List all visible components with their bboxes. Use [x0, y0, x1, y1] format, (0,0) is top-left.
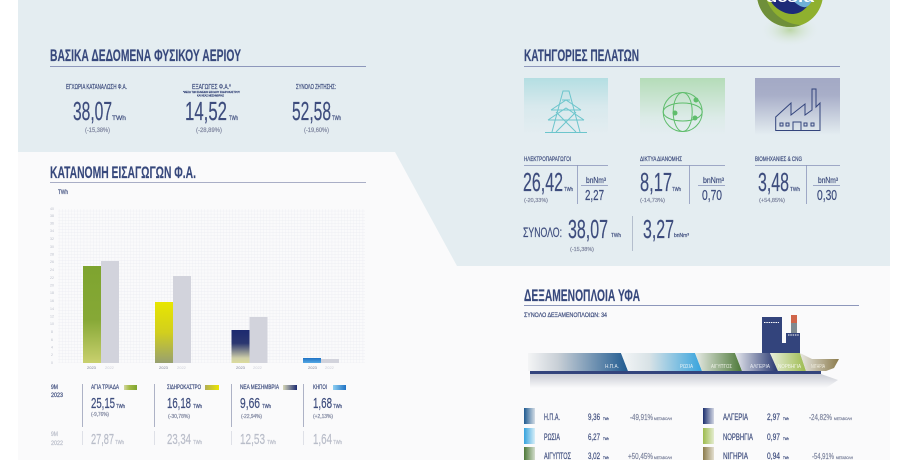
stat: domestic consumption: (-15,38%): [85, 127, 110, 134]
period labels: 9Μ: [51, 384, 58, 391]
stat column: Sidirokastro: 16,18: [167, 395, 191, 412]
legend row: Norway: 0,97: [767, 432, 780, 442]
superstructure: [762, 315, 800, 353]
icon panel: globe network: [640, 78, 725, 135]
stat column: Kipoi: (+2,13%): [313, 414, 333, 420]
hull shadow: [530, 374, 838, 388]
stat: total demand: 52,58: [292, 96, 331, 126]
stat column: Agia Triada: TWh: [115, 440, 124, 446]
customer: industry and CNG: 0,30: [817, 187, 837, 204]
axis labels: 16: [50, 299, 54, 303]
axis labels: 24: [50, 268, 54, 272]
axis labels: 38: [50, 214, 54, 218]
stat: total demand: TWh: [332, 115, 341, 122]
stat column: Agia Triada: (-9,76%): [91, 412, 109, 418]
stat column: Nea Mesimvria: 9,66: [240, 395, 260, 412]
customer: power producers: ΗΛΕΚΤΡΟΠΑΡΑΓΩΓΟΙ: [524, 156, 571, 163]
customer totals: TWh: [611, 233, 621, 239]
axis labels: 26: [50, 260, 54, 264]
stat: exports: (-28,89%): [196, 127, 222, 134]
stat column: Nea Mesimvria: TWh: [267, 440, 276, 446]
legend row: Algeria: [703, 408, 852, 424]
year labels: 2022: [253, 365, 263, 370]
legend row: Nigeria: [703, 447, 853, 460]
bars: Sidirokastro: [155, 276, 191, 363]
customer totals: bnNm³: [674, 233, 689, 239]
customer: distribution networks: 8,17: [640, 167, 672, 197]
legend row: Russia: [524, 428, 609, 444]
stat column: Agia Triada: [82, 384, 137, 448]
stat column: Sidirokastro: 23,34: [167, 431, 191, 448]
customer: industry and CNG: bnNm³: [818, 176, 838, 185]
stat: total demand: ΣΥΝΟΛΟ ΖΗΤΗΣΗΣ:: [296, 84, 336, 91]
stat: exports: 14,52: [185, 96, 227, 126]
stat: exports: [183, 84, 240, 134]
customer totals: (-15,38%): [570, 247, 594, 253]
year labels: 2023: [87, 365, 97, 370]
stat: total demand: [292, 84, 341, 134]
customer: industry and CNG: (+54,85%): [759, 198, 785, 204]
axis labels: 14: [50, 307, 54, 311]
customer: distribution networks: ΔΙΚΤΥΑ ΔΙΑΝΟΜΗΣ: [640, 156, 682, 163]
stat column: Kipoi: [303, 384, 346, 448]
stat: exports: ΚΑΙ ΝΕΑΣ ΜΕΣΗΜΒΡΙΑΣ: [197, 94, 224, 98]
axis labels: 8: [51, 330, 53, 334]
period labels: 9Μ: [51, 431, 58, 438]
legend row: Algeria: TWh: [783, 416, 789, 421]
hull segment: USA: Η.Π.Α.: [605, 364, 619, 370]
hull segment: Russia: ΡΩΣΙΑ: [680, 364, 693, 370]
stat column: Kipoi: ΚΗΠΟΙ: [313, 384, 327, 391]
bar chart: [50, 190, 365, 370]
customer totals: 3,27: [643, 214, 674, 244]
hull segment: Algeria: [735, 353, 778, 371]
stat: domestic consumption: TWh: [112, 115, 126, 122]
hull segment: Norway: [770, 353, 806, 371]
customer: power producers: [523, 156, 608, 204]
stat column: Kipoi: TWh: [333, 404, 342, 410]
axis labels: 4: [51, 346, 53, 350]
bars: Nea Mesimvria: [232, 317, 268, 363]
axis labels: 20: [50, 284, 54, 288]
stat column: Nea Mesimvria: 12,53: [240, 431, 265, 448]
customer totals: 38,07: [568, 214, 608, 244]
hull segment: Nigeria: [800, 353, 839, 371]
legend row: USA: TWh: [603, 416, 609, 421]
legend row: Norway: TWh: [783, 436, 789, 441]
bar chart: TWh: [58, 190, 68, 196]
stat column: Sidirokastro: (-30,78%): [168, 414, 190, 420]
axis labels: 36: [50, 222, 54, 226]
year labels: 2022: [177, 365, 187, 370]
year labels: 2023: [236, 365, 246, 370]
stat: total demand: (-19,60%): [304, 127, 329, 134]
axis labels: 12: [50, 314, 54, 318]
stat column: Kipoi: 1,64: [313, 431, 332, 448]
stat column: Nea Mesimvria: (-22,94%): [241, 414, 262, 420]
customer: industry and CNG: TWh: [790, 187, 800, 193]
axis labels: 18: [50, 291, 54, 295]
customer totals: [523, 214, 689, 253]
heading: customer categories: ΚΑΤΗΓΟΡΙΕΣ ΠΕΛΑΤΩΝ: [524, 46, 639, 65]
axis labels: 30: [50, 245, 54, 249]
legend row: USA: ΜΕΤΑΒΟΛΗ: [654, 417, 672, 421]
legend row: Russia: ΡΩΣΙΑ: [544, 432, 560, 442]
customer: distribution networks: bnNm³: [703, 176, 724, 185]
stat column: Sidirokastro: TWh: [193, 440, 202, 446]
customer: industry and CNG: 3,48: [758, 167, 789, 197]
legend row: Norway: [703, 428, 789, 444]
legend row: USA: [524, 408, 672, 424]
legend row: Algeria: -24,82%: [809, 413, 832, 422]
stat column: Nea Mesimvria: ΝΕΑ ΜΕΣΗΜΒΡΙΑ: [240, 384, 279, 391]
axis labels: 22: [50, 276, 54, 280]
year labels: 2023: [159, 365, 169, 370]
bars: Agia Triada: [83, 261, 119, 363]
stat: domestic consumption: 38,07: [73, 96, 112, 126]
customer: distribution networks: [640, 156, 725, 204]
icon panel: power pylon: [524, 78, 608, 135]
hull segment: Egypt: ΑΙΓΥΠΤΟΣ: [711, 364, 732, 370]
logo: [757, 0, 823, 47]
customer: power producers: 2,27: [585, 187, 604, 204]
stat: exports: TWh: [229, 115, 238, 122]
legend row: Algeria: ΜΕΤΑΒΟΛΗ: [834, 417, 852, 421]
stat column: Nea Mesimvria: [231, 384, 297, 448]
axis labels: 40: [50, 207, 54, 211]
stat column: Agia Triada: TWh: [116, 404, 125, 410]
legend row: Egypt: [524, 447, 672, 460]
customer: distribution networks: TWh: [672, 187, 681, 193]
axis labels: 0: [51, 361, 53, 365]
heading: LNG tankers: ΔΕΞΑΜΕΝΟΠΛΟΙΑ ΥΦΑ: [524, 286, 640, 305]
customer: distribution networks: (-14,73%): [640, 198, 665, 204]
legend row: Nigeria: TWh: [783, 455, 789, 460]
legend row: Russia: TWh: [603, 436, 609, 441]
legend row: Norway: ΝΟΡΒΗΓΙΑ: [723, 432, 753, 442]
customer: power producers: TWh: [564, 187, 573, 193]
tanker illustration: [528, 315, 839, 388]
stat column: Nea Mesimvria: TWh: [262, 404, 271, 410]
bars: Kipoi: [303, 358, 339, 363]
customer: power producers: (-20,33%): [524, 198, 548, 204]
stat column: Kipoi: 1,68: [313, 395, 332, 412]
stat column: Sidirokastro: TWh: [193, 404, 202, 410]
heading: imports distribution: ΚΑΤΑΝΟΜΗ ΕΙΣΑΓΩΓΩΝ Φ.Α.: [50, 163, 196, 182]
legend row: Egypt: ΜΕΤΑΒΟΛΗ: [654, 456, 672, 460]
customer: power producers: 26,42: [523, 167, 563, 197]
stat column: Sidirokastro: ΣΙΔΗΡΟΚΑΣΤΡΟ: [167, 384, 201, 391]
stat: exports: ΕΞΑΓΩΓΕΣ Φ.Α.*: [192, 84, 231, 91]
axis labels: [50, 207, 54, 365]
customer: industry and CNG: [755, 156, 840, 204]
tanker count: ΣΥΝΟΛΟ ΔΕΞΑΜΕΝΟΠΛΟΙΩΝ: 34: [524, 312, 607, 319]
hull segment: Algeria: ΑΛΓΕΡΙΑ: [750, 364, 770, 370]
legend row: Egypt: TWh: [603, 455, 609, 460]
axis labels: 2: [51, 353, 53, 357]
period labels: 2022: [51, 440, 63, 447]
year labels: 2023: [308, 365, 318, 370]
stat column: Kipoi: TWh: [333, 440, 342, 446]
heading: key data: ΒΑΣΙΚΑ ΔΕΔΟΜΕΝΑ ΦΥΣΙΚΟΥ ΑΕΡΙΟΥ: [50, 46, 241, 65]
hull segment: Russia: [621, 353, 702, 371]
customer: distribution networks: 0,70: [702, 187, 722, 204]
stat column: Sidirokastro: [154, 384, 219, 448]
hull segment: Nigeria: ΝΙΓΗΡΙΑ: [811, 364, 825, 370]
stat: exports: *ΜΕΣΩ ΤΩΝ ΣΗΜΕΙΩΝ ΕΙΣΟΔΟΥ ΣΙΔΗΡΟΚΑΣΤΡΟΥ: [183, 90, 240, 94]
period labels: [51, 384, 63, 447]
year labels: [87, 365, 335, 370]
icon panel: factory: [755, 78, 840, 135]
hull segment: Norway: ΝΟΡΒΗΓΙΑ: [778, 364, 801, 370]
year labels: 2022: [325, 365, 335, 370]
hull segment: Egypt: [695, 353, 742, 371]
axis labels: 6: [51, 338, 53, 342]
legend row: USA: -49,91%: [630, 413, 653, 422]
customer: power producers: bnNm³: [586, 176, 606, 185]
period labels: 2023: [51, 392, 63, 399]
customer totals: ΣΥΝΟΛΟ:: [523, 224, 562, 240]
hull segment: USA: [528, 353, 628, 371]
axis labels: 34: [50, 229, 54, 233]
year labels: 2022: [105, 365, 115, 370]
legend row: Russia: 6,27: [588, 432, 600, 442]
legend row: USA: Η.Π.Α.: [544, 412, 560, 422]
customer: industry and CNG: ΒΙΟΜΗΧΑΝΙΕΣ & CNG: [755, 156, 802, 163]
axis labels: 10: [50, 322, 54, 326]
legend row: Algeria: ΑΛΓΕΡΙΑ: [723, 412, 748, 422]
stat column: Agia Triada: 25,15: [91, 395, 115, 412]
legend row: Nigeria: ΜΕΤΑΒΟΛΗ: [836, 456, 853, 460]
axis labels: 32: [50, 237, 54, 241]
stat column: Agia Triada: ΑΓΙΑ ΤΡΙΑΔΑ: [91, 384, 119, 391]
keel stripe: [530, 371, 821, 374]
legend row: USA: 9,36: [588, 412, 600, 422]
stat: domestic consumption: ΕΓΧΩΡΙΑ ΚΑΤΑΝΑΛΩΣΗ Φ.Α.: [66, 84, 127, 91]
stat column: Agia Triada: 27,87: [91, 431, 114, 448]
stat: domestic consumption: [66, 84, 127, 134]
axis labels: 28: [50, 252, 54, 256]
legend row: Algeria: 2,97: [767, 412, 780, 422]
light lower panel: [18, 152, 890, 460]
